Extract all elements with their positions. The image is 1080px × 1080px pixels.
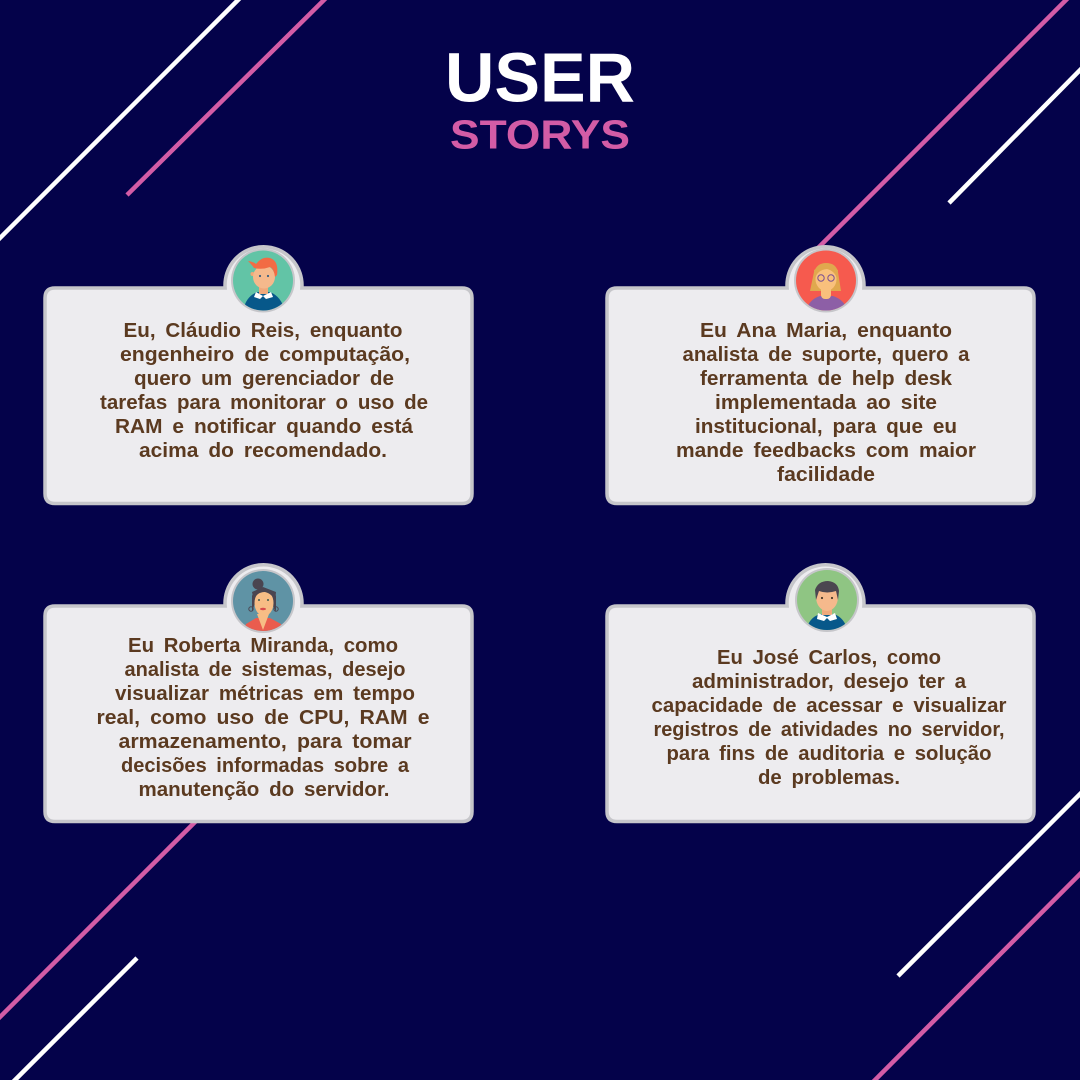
text: Cláudio story: RAM e notificar quando está [115,416,414,438]
title: STORYS [450,112,630,158]
text: Roberta story: decisões informadas sobre a [121,755,410,777]
text: Ana story: implementada ao site [715,392,937,414]
text: Ana story: facilidade [777,464,875,486]
panel: Ana Maria [607,247,1034,504]
text: José story: Eu José Carlos, como [717,647,941,669]
text: José story: para fins de auditoria e solução [666,743,992,765]
text: Ana story [676,320,976,486]
text: José story: de problemas. [758,767,900,789]
text: Cláudio story: tarefas para monitorar o uso de [100,392,428,414]
panel: Cláudio Reis [45,247,472,504]
text: José story: capacidade de acessar e visualizar [652,695,1007,717]
text: Ana story: analista de suporte, quero a [682,344,970,366]
title [445,38,635,158]
text: Roberta story: real, como uso de CPU, RAM e [96,707,430,729]
text: José story: administrador, desejo ter a [692,671,967,693]
panel: Roberta Miranda [45,565,472,822]
icon: avatar Ana [794,248,858,312]
text: Cláudio story: engenheiro de computação, [120,344,410,366]
text: Cláudio story: acima do recomendado. [139,440,387,462]
text: Roberta story: Eu Roberta Miranda, como [128,635,398,657]
text: José story: registros de atividades no servidor, [654,719,1004,741]
text: Roberta story: manutenção do servidor. [138,779,390,801]
title: USER [445,38,635,116]
text: Cláudio story: Eu, Cláudio Reis, enquanto [124,320,402,342]
text: Ana story: mande feedbacks com maior [676,440,976,462]
text: Ana story: institucional, para que eu [695,416,957,438]
icon: avatar Cláudio [231,248,295,312]
text: Cláudio story [100,320,428,462]
text: Roberta story: analista de sistemas, desejo [124,659,406,681]
text: Cláudio story: quero um gerenciador de [134,368,394,390]
icon: avatar José [795,568,859,632]
text: Ana story: Eu Ana Maria, enquanto [700,320,952,342]
text: Roberta story: visualizar métricas em tempo [115,683,415,705]
text: Roberta story: armazenamento, para tomar [118,731,412,753]
text: Roberta story [96,635,430,801]
text: Ana story: ferramenta de help desk [700,368,953,390]
icon: avatar Roberta [231,569,295,633]
panel: José Carlos [607,565,1034,822]
text: José story [652,647,1007,789]
